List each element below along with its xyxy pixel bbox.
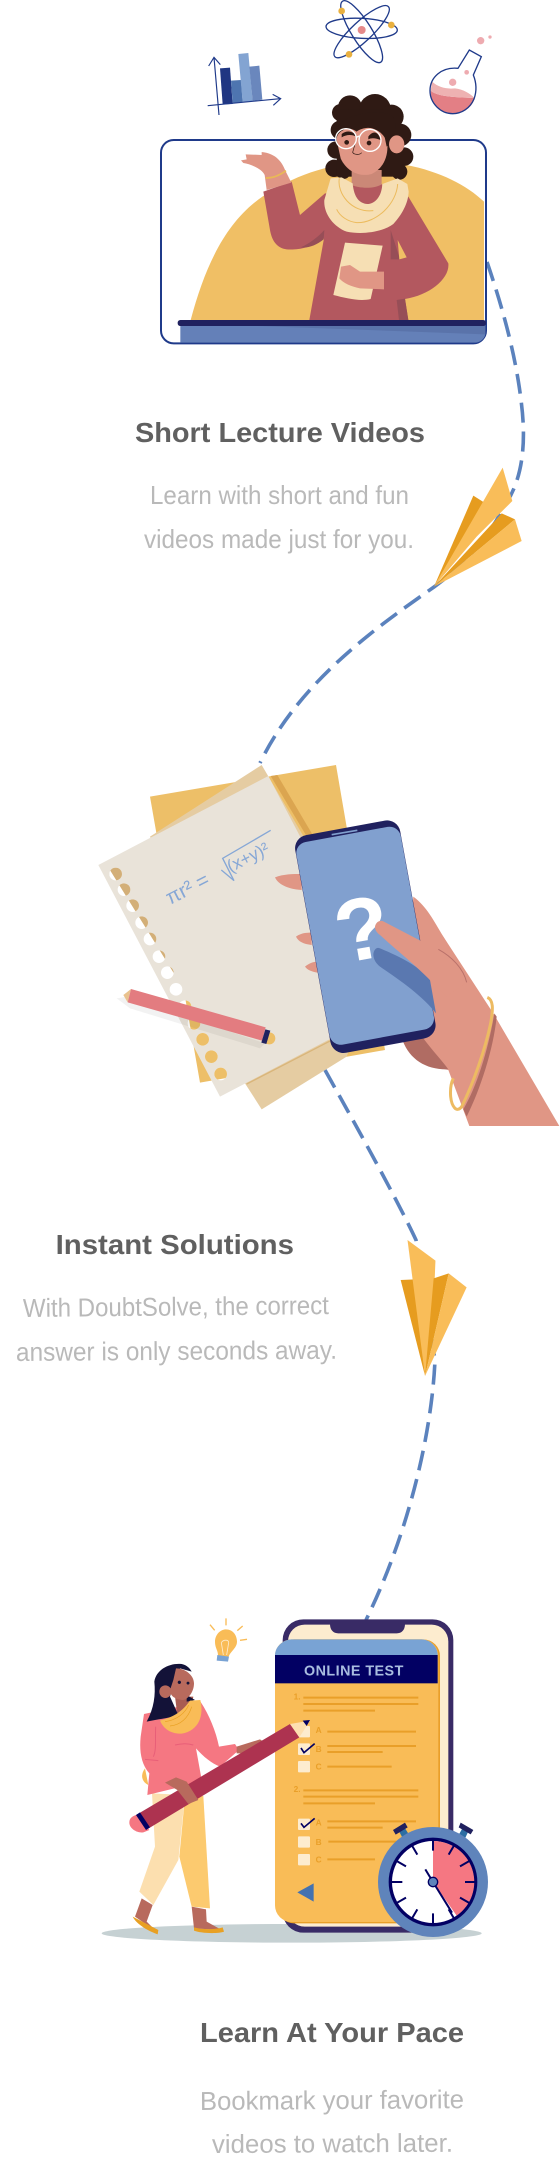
answer boxes — [298, 1726, 310, 1865]
illustration: online test — [102, 1618, 488, 1943]
phone notch — [330, 1624, 405, 1633]
phone screen — [288, 1625, 448, 1927]
dashed path from laptop to notes — [260, 262, 523, 763]
clothing — [263, 182, 448, 320]
question labels: C — [316, 1761, 322, 1771]
pupils — [344, 140, 371, 145]
pants yellow — [179, 1796, 210, 1908]
icon: paper plane one — [434, 468, 522, 587]
scarf — [324, 177, 409, 233]
stopwatch — [378, 1823, 488, 1937]
heading: short lecture videos: Short Lecture Videos — [135, 417, 425, 448]
tan sheet — [150, 765, 380, 1109]
yellow dome background — [191, 162, 484, 320]
student figure — [129, 1664, 310, 1934]
eyes — [178, 1681, 190, 1685]
heading: instant solutions: Instant Solutions — [56, 1229, 294, 1260]
phone speaker — [332, 830, 357, 835]
icon: flask — [430, 35, 492, 114]
question labels: A — [316, 1818, 322, 1828]
glasses — [336, 129, 381, 151]
phone screen — [294, 825, 436, 1047]
test sheet — [275, 1639, 440, 1923]
bangle shadow — [463, 1013, 497, 1117]
question labels: 2. — [294, 1784, 301, 1794]
nose — [353, 138, 362, 154]
pencil eraser — [129, 1815, 149, 1832]
holding hand — [339, 265, 384, 289]
question labels — [294, 1691, 322, 1864]
pencil — [117, 989, 275, 1048]
neck — [175, 1697, 193, 1715]
bracelet — [266, 171, 286, 178]
scarf — [160, 1700, 201, 1734]
icon: paper plane two — [401, 1240, 467, 1376]
math formula — [162, 830, 273, 909]
thumb — [375, 898, 470, 997]
forearm and wrist — [403, 897, 559, 1126]
hand on pencil top — [237, 1739, 264, 1753]
text: pace description line 2: videos to watch later. — [212, 2128, 453, 2159]
heading: learn at your pace: Learn At Your Pace — [200, 2017, 464, 2048]
scarf folds — [165, 1705, 192, 1726]
shoes — [133, 1917, 224, 1934]
gripping hand — [165, 1777, 198, 1804]
question labels: B — [316, 1837, 322, 1847]
big pencil — [133, 1724, 299, 1832]
bag strap — [142, 1768, 148, 1785]
bangle — [451, 997, 492, 1109]
page shadow edge — [247, 1039, 333, 1084]
hair back — [325, 94, 413, 180]
back arrow — [297, 1883, 314, 1902]
hand shadow on screen — [373, 948, 436, 1013]
text: lecture description line 1: Learn with short and fun — [150, 480, 409, 510]
text: solutions description line 2: answer is only seconds away. — [16, 1335, 337, 1367]
scarf folds — [337, 178, 398, 223]
notebook page — [98, 776, 390, 1097]
palm shadow — [403, 1038, 448, 1069]
phone body — [293, 818, 438, 1055]
icon: bar chart — [208, 53, 281, 115]
math formula: πr² = — [162, 868, 213, 909]
icon: light bulb — [210, 1618, 247, 1662]
notebook holes — [110, 868, 227, 1080]
sleeve fold — [301, 230, 408, 320]
neck — [352, 170, 382, 188]
yellow back sheet — [150, 765, 385, 1083]
hair — [147, 1664, 195, 1722]
teacher figure — [241, 94, 448, 320]
top — [140, 1702, 239, 1795]
question labels: A — [316, 1725, 322, 1735]
ear — [159, 1685, 171, 1698]
text: solutions description line 1: With DoubtSolve, the correct — [23, 1290, 330, 1323]
text: lecture description line 2: videos made just for you. — [144, 524, 414, 554]
eyes and brows — [342, 131, 381, 140]
test title: ONLINE TEST — [304, 1663, 404, 1679]
question labels: B — [316, 1744, 322, 1754]
book — [333, 243, 383, 300]
face — [170, 1668, 194, 1700]
dashed path from notes to online test — [325, 1070, 435, 1620]
hair fringe — [334, 112, 395, 147]
face — [337, 127, 387, 175]
pencil lead — [303, 1720, 310, 1726]
phone body — [283, 1619, 453, 1933]
check marks — [301, 1744, 315, 1827]
ear — [389, 135, 404, 153]
knuckle crease — [438, 949, 467, 982]
fingers behind phone — [275, 874, 317, 973]
raised hand — [241, 152, 291, 190]
pencil band — [136, 1812, 150, 1830]
ground shadow — [102, 1924, 482, 1943]
illustration: teacher on video screen — [161, 0, 492, 343]
question labels: 1. — [294, 1691, 301, 1701]
legs skin — [135, 1898, 222, 1932]
sleeve fold — [145, 1727, 193, 1761]
laptop screen frame — [161, 140, 486, 343]
question lines — [303, 1698, 418, 1859]
pants light — [139, 1793, 185, 1905]
question labels: C — [316, 1854, 322, 1864]
gap showing background — [398, 240, 407, 259]
neckline — [352, 184, 382, 203]
illustration: notes and phone — [98, 765, 559, 1126]
text: pace description line 1: Bookmark your favorite — [200, 2084, 464, 2116]
laptop base — [178, 320, 486, 343]
question mark: ? — [327, 875, 397, 982]
pencil tip — [290, 1721, 310, 1737]
sheet fold — [271, 775, 313, 837]
icon: atom — [326, 0, 398, 67]
math formula: (x+y)² — [223, 838, 273, 876]
